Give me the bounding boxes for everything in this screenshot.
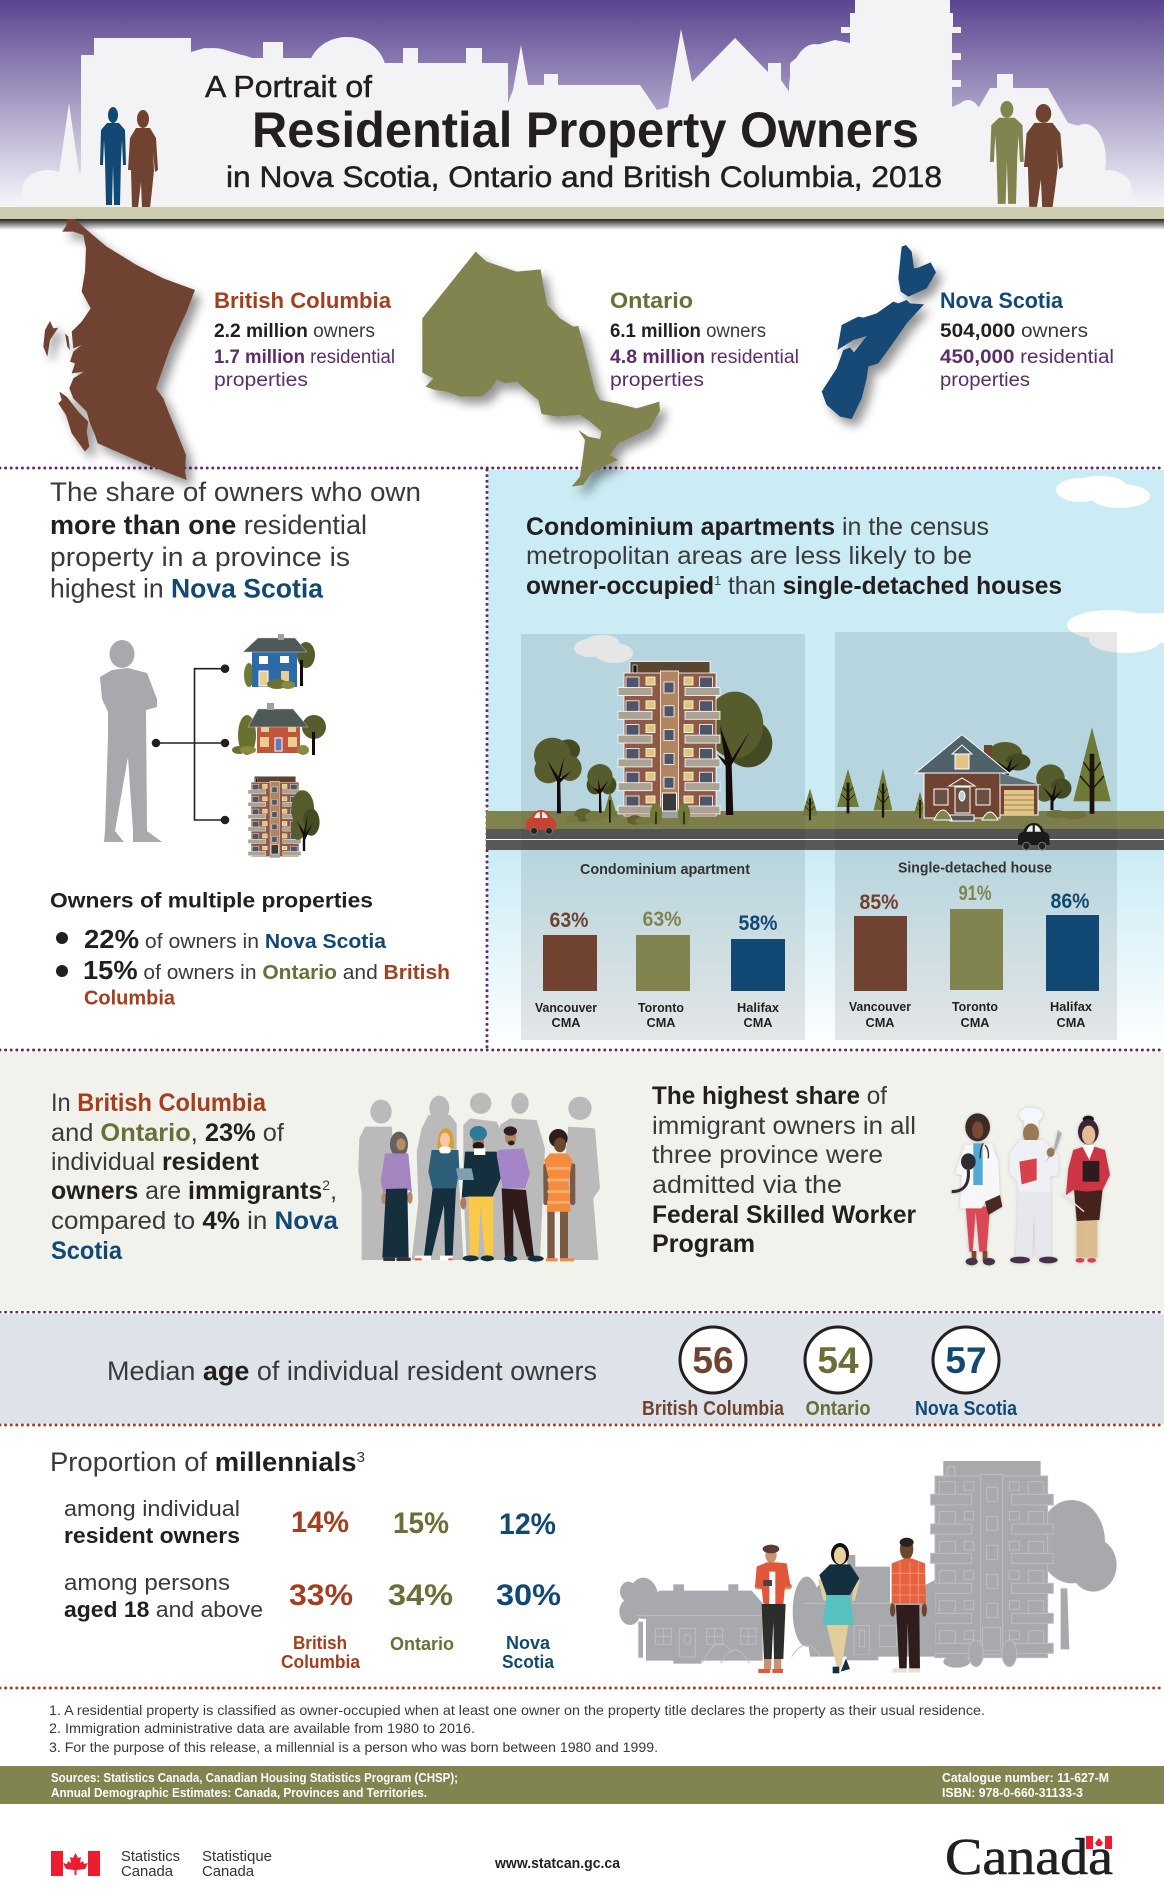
bar: Halifax [1046,890,1099,1030]
Statistics Canada logo: Canada [121,1863,174,1880]
text: British Columbia stats: properties [214,370,308,391]
bar: Vancouver: Vancouver [535,1000,597,1015]
title [205,69,942,194]
grey tree right [1038,1500,1117,1649]
icon: house [916,734,1041,821]
text: Ontario stats: 6.1 million owners [610,321,766,342]
Statistics Canada logo: Statistics [121,1848,180,1865]
person: woman in orange dress [543,1129,575,1261]
age circle: British Columbia: British Columbia [642,1398,785,1420]
text: immigrant share: In British Columbia [51,1089,267,1117]
panel: immigrant owners [0,1052,1164,1311]
footnotes [49,1702,985,1755]
percentages: 14% [291,1506,349,1539]
bar: Vancouver: 63% [550,909,589,932]
province labels: Nova [506,1633,551,1653]
bar: Halifax [731,912,785,1030]
bar: Toronto [636,908,690,1030]
text: Nova Scotia stats: 450,000 residential [940,347,1114,368]
age circle: Nova Scotia [915,1327,1018,1420]
bar: Toronto: Toronto [952,999,998,1014]
Canada wordmark: Canada [945,1829,1113,1886]
person: woman in teal skirt [818,1543,860,1673]
person: chef [1009,1108,1062,1263]
icon: red house [232,703,326,755]
age circle: Ontario: Ontario [806,1398,870,1420]
map: Nova Scotia [822,245,936,419]
province labels: Columbia [281,1652,361,1672]
icon: apartment building [248,776,320,858]
person: woman with phone [755,1545,792,1673]
bar chart: single-detached house [835,632,1117,1040]
bullet: 15 percent [56,955,450,1010]
text: share of owners heading: highest in Nova Scotia [50,574,324,604]
person: man in plaid sweater [890,1538,927,1673]
panel: sky background for condominium section [488,470,1164,1050]
age circle: British Columbia [642,1327,785,1420]
row labels [64,1496,263,1622]
text: federal skilled worker: Program [652,1230,755,1258]
bar: Toronto: CMA [646,1015,676,1030]
text: condominium heading: than [721,572,783,600]
illustration: millennials neighbourhood [619,1461,1117,1673]
scene: condominium apartment [526,635,818,834]
grey middle house [793,1555,935,1660]
text: federal skilled worker: immigrant owners in all [652,1112,916,1140]
percentages: 33% [289,1579,353,1612]
bar: Toronto: CMA [960,1015,990,1030]
province labels: British [293,1633,347,1653]
Statistics Canada logo [51,1848,272,1880]
icon: blue house [243,634,315,689]
percentages: 15% [393,1507,449,1540]
text: condominium heading: 1 [714,573,721,588]
bar: Halifax: 86% [1050,890,1090,913]
age circle: Ontario [805,1327,871,1420]
cloud top right [1056,476,1150,508]
text: immigrant share: , [330,1177,337,1205]
bar chart: condominium apartment [521,634,805,1040]
text: condominium heading: metropolitan areas are less likely to be [526,542,972,570]
footnotes: 2. Immigration administrative data are available from 1980 to 2016. [49,1720,475,1736]
website: www.statcan.gc.ca [494,1855,621,1872]
person: blonde woman [415,1128,459,1260]
bar: Vancouver: CMA [866,1015,895,1030]
province labels [281,1633,555,1672]
text: Ontario stats [610,288,799,391]
text: share of owners heading: property in a province is [50,542,350,572]
bullet: 15 percent: Columbia [84,988,176,1010]
header banner [0,0,1164,219]
footnotes: 1. A residential property is classified as owner-occupied when at least one owner on the property title declares the property as their usual residence. [49,1702,985,1718]
text: Nova Scotia stats: Nova Scotia [940,288,1064,313]
text: owners of multiple properties: Owners of multiple properties [50,890,373,912]
text: share of owners heading: The share of owners who own [50,477,421,507]
icon: red car [526,810,556,834]
row labels: among persons [64,1570,230,1595]
percentages: 30% [496,1579,561,1612]
text: British Columbia stats [214,288,395,391]
grey tower [931,1461,1053,1658]
bar: Toronto: 63% [642,908,682,931]
text: Ontario stats: Ontario [610,288,693,313]
text: immigrant share: individual resident [51,1148,260,1176]
panel: median age [0,1314,1164,1424]
sources band: Catalogue number: 11-627-M [942,1770,1109,1785]
bar: Vancouver: CMA [552,1015,581,1030]
panel: median age: Median age of individual resident owners [107,1356,597,1386]
panel: millennials [50,1447,1117,1673]
bar: Halifax: Halifax [737,1000,780,1015]
illustration: group of immigrants [358,1093,600,1262]
text: immigrant share: Scotia [51,1237,123,1265]
person: man with turban [456,1126,501,1261]
bar: Vancouver [849,891,911,1030]
text: federal skilled worker: admitted via the [652,1171,842,1199]
sources band [0,1766,1164,1804]
text: immigrant share [51,1089,339,1265]
icon: wordmark flag [1086,1836,1112,1849]
text: British Columbia stats: 1.7 million residential [214,347,395,368]
icon: tree right of building [707,692,772,815]
bar: Halifax: Halifax [1050,999,1093,1014]
age circle: Ontario: 54 [817,1340,859,1381]
icon: olive man silhouette [990,101,1024,204]
Statistics Canada logo: Statistique [202,1848,272,1865]
illustration: skilled workers [952,1108,1110,1265]
bar: Toronto: 91% [958,882,992,905]
bullet: 22 percent: 22% of owners in Nova Scotia [84,924,387,954]
text: Ontario stats: properties [610,370,704,391]
text: British Columbia stats: 2.2 million owners [214,321,375,342]
city skyline [22,0,1132,210]
bar: Vancouver: Vancouver [849,999,911,1014]
ground band [0,207,1164,219]
sources band: ISBN: 978-0-660-31133-3 [942,1785,1083,1800]
text: condominium heading: single-detached houses [783,572,1062,600]
title: in Nova Scotia, Ontario and British Columbia, 2018 [226,161,942,194]
text: immigrant share: and Ontario, 23% of [51,1119,284,1147]
bar: Halifax: 58% [738,912,778,935]
scene: single-detached house [837,727,1111,850]
grey tree left [619,1578,658,1658]
row labels: aged 18 and above [64,1597,263,1622]
panel: millennials: Proportion of millennials [50,1447,354,1477]
age circle: Nova Scotia: 57 [945,1340,987,1381]
cloud right [1067,610,1164,653]
sources band: Annual Demographic Estimates: Canada, Provinces and Territories. [51,1785,427,1800]
text: immigrant share: compared to 4% in Nova [51,1207,339,1235]
icon: Canadian flag [51,1851,100,1876]
text: Nova Scotia stats: properties [940,370,1030,391]
text: federal skilled worker: The highest share of [652,1082,887,1110]
icon: owner silhouette [100,640,162,842]
icon: brown woman silhouette [128,110,158,209]
icon: apartment tower [618,662,720,818]
text: immigrant share: 2 [322,1177,330,1193]
panel: millennials: 3 [357,1449,365,1466]
sources band: Sources: Statistics Canada, Canadian Housing Statistics Program (CHSP); [51,1770,458,1785]
text: federal skilled worker: Federal Skilled Worker [652,1201,916,1229]
percentages [289,1506,561,1612]
icon: trees and bushes left [534,738,690,825]
text: Nova Scotia stats [940,288,1114,391]
connector diagram [152,664,229,824]
percentages: 34% [388,1579,453,1612]
footnotes: 3. For the purpose of this release, a millennial is a person who was born between 1980 and 1999. [49,1739,658,1755]
text: share of owners heading: more than one residential [50,510,367,540]
text: immigrant share: owners are immigrants [51,1177,323,1205]
text: federal skilled worker [652,1082,916,1258]
person: doctor [952,1113,1002,1265]
province labels: Scotia [502,1652,555,1672]
Statistics Canada logo: Canada [202,1863,255,1880]
text: Nova Scotia stats: 504,000 owners [940,321,1088,342]
bar chart: condominium apartment: Condominium apartment [580,861,750,878]
person: business woman [1062,1116,1110,1263]
map: Ontario [422,252,660,487]
row labels: resident owners [64,1523,240,1548]
age circle: Nova Scotia: Nova Scotia [915,1398,1018,1420]
text: share of owners heading [50,477,421,604]
icon: blue man silhouette [100,107,126,205]
icon: brown woman silhouette right [1024,104,1063,208]
text: owners of multiple properties [50,890,450,1010]
text: condominium heading [526,513,1062,600]
title: Residential Property Owners [252,102,919,158]
bar: Vancouver [535,909,597,1030]
text: British Columbia stats: British Columbia [214,288,392,313]
text: Ontario stats: 4.8 million residential [610,347,799,368]
bar: Toronto: Toronto [638,1000,684,1015]
bar: Halifax: CMA [1056,1015,1086,1030]
percentages: 12% [499,1508,556,1541]
person: woman in hijab [381,1132,413,1261]
person: man in purple sweater [497,1126,544,1262]
icon: black car [1018,823,1050,850]
title: A Portrait of [205,69,372,104]
bar: Toronto [950,882,1003,1030]
grey house left [637,1584,821,1664]
map: British Columbia [43,219,195,480]
ground and road [486,811,1164,850]
age circle: British Columbia: 56 [692,1340,734,1381]
text: condominium heading: owner-occupied [526,572,714,600]
bar: Vancouver: 85% [860,891,899,914]
bar chart: single-detached house: Single-detached house [898,860,1052,876]
bullet: 15 percent: 15% of owners in Ontario and British [83,955,450,985]
text: federal skilled worker: three province were [652,1141,883,1169]
bar: Halifax: CMA [744,1015,773,1030]
text: condominium heading: Condominium apartments in the census [526,513,989,541]
province labels: Ontario [390,1634,454,1654]
row labels: among individual [64,1496,240,1521]
